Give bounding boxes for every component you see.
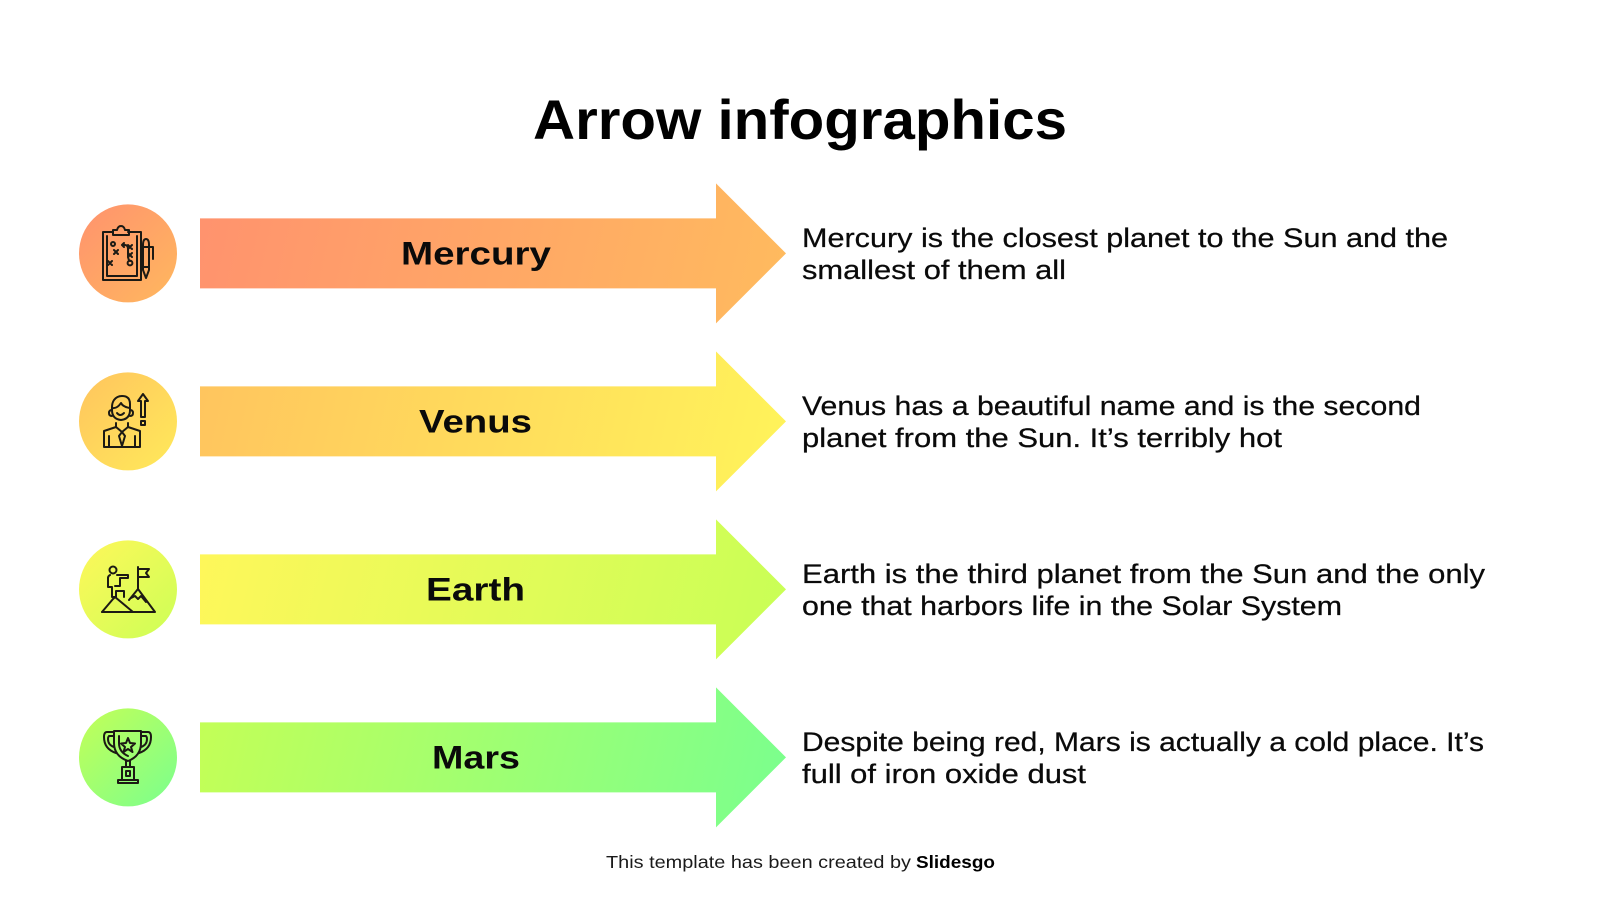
panel: Earth bbox=[79, 519, 1486, 659]
icon: trophy with star bbox=[79, 708, 177, 806]
arrow: Mercury bbox=[200, 183, 786, 323]
description: Mercury bbox=[802, 223, 1448, 285]
description: Earth: Earth is the third planet from the Sun and the only bbox=[802, 559, 1486, 589]
label: Mercury: Mercury bbox=[401, 236, 551, 272]
description: Venus bbox=[802, 391, 1421, 453]
icon: clipboard with strategy plan and pen bbox=[79, 204, 177, 302]
description: Venus: Venus has a beautiful name and is the second bbox=[802, 391, 1421, 421]
description: Earth: one that harbors life in the Solar System bbox=[802, 591, 1342, 621]
arrow: Earth bbox=[200, 519, 786, 659]
description: Mercury: Mercury is the closest planet to the Sun and the bbox=[802, 223, 1448, 253]
description: Mercury: smallest of them all bbox=[802, 255, 1066, 285]
footer credit: Slidesgo bbox=[916, 852, 995, 872]
panel: Mercury bbox=[79, 183, 1448, 323]
description: Earth bbox=[802, 559, 1486, 621]
description: Mars: full of iron oxide dust bbox=[802, 759, 1087, 789]
icon: climber on mountain with flag bbox=[79, 540, 177, 638]
description: Mars: Despite being red, Mars is actually a cold place. It’s bbox=[802, 727, 1484, 757]
icon: businessman with up arrow bbox=[79, 372, 177, 470]
footer credit bbox=[606, 852, 995, 872]
panel: Venus bbox=[79, 351, 1421, 491]
label: Earth: Earth bbox=[426, 572, 525, 608]
title: Arrow infographics bbox=[533, 88, 1067, 151]
description: Mars bbox=[802, 727, 1484, 789]
footer credit: This template has been created by bbox=[606, 852, 911, 872]
label: Mars: Mars bbox=[432, 740, 520, 776]
arrow: Mars bbox=[200, 687, 786, 827]
label: Venus: Venus bbox=[419, 404, 532, 440]
panel: Mars bbox=[79, 687, 1484, 827]
arrow: Venus bbox=[200, 351, 786, 491]
description: Venus: planet from the Sun. It’s terribly hot bbox=[802, 423, 1283, 453]
